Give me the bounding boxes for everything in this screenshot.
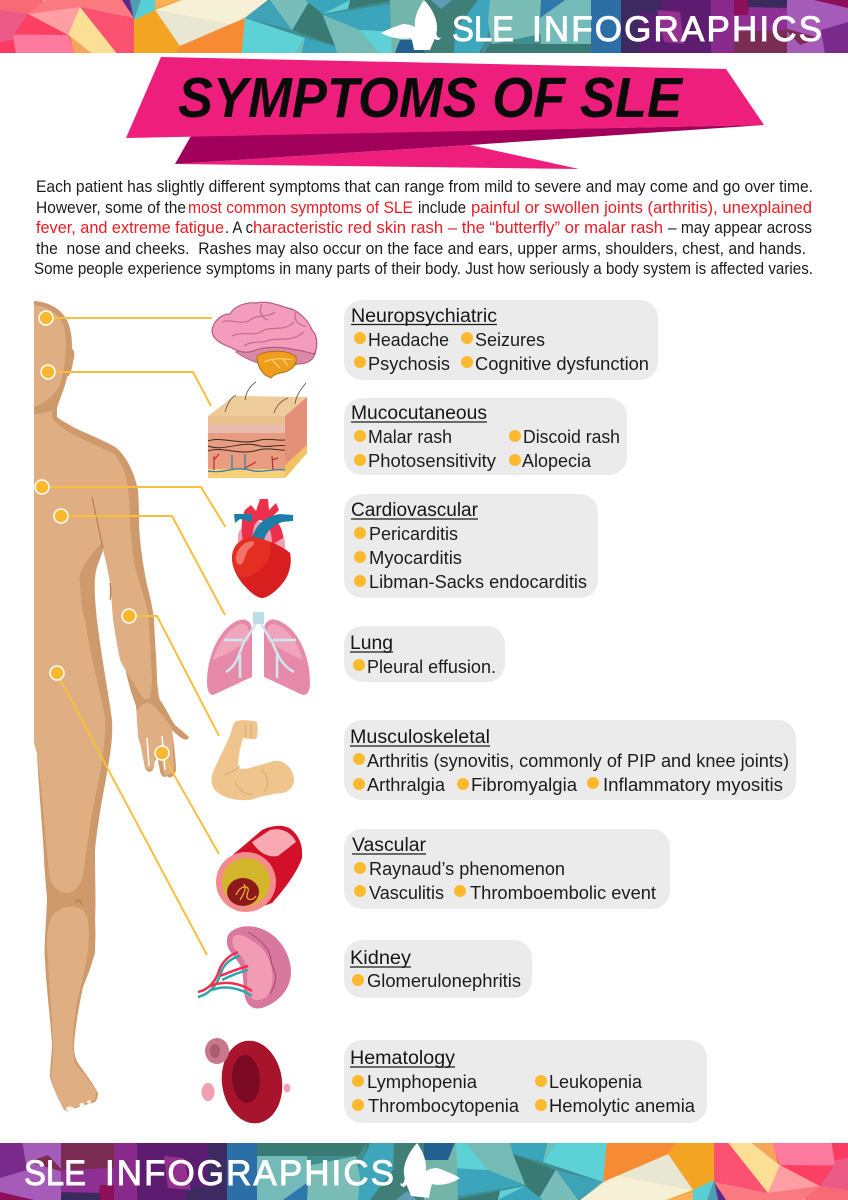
- panel: cardiovascular: Myocarditis: [369, 547, 462, 568]
- icon: butterfly bottom: [400, 1143, 460, 1198]
- panel: cardiovascular: Cardiovascular: [351, 500, 479, 521]
- panel: neuropsychiatric: [344, 300, 658, 380]
- panel: musculoskeletal: Inflammatory myositis: [603, 774, 783, 795]
- intro paragraph: most common symptoms of SLE: [188, 199, 413, 217]
- panel: hematology: [344, 1040, 707, 1123]
- panel: vascular: Vascular: [352, 835, 427, 856]
- banner text bottom: INFOGRAPHICS: [105, 1154, 394, 1193]
- panel: mucocutaneous: [344, 398, 627, 475]
- intro paragraph: haracteristic red skin rash – the “butterfly” or malar rash: [253, 219, 663, 237]
- panel: mucocutaneous: Malar rash: [368, 426, 452, 447]
- icon: butterfly top: [381, 0, 441, 50]
- panel: vascular: Vasculitis: [369, 882, 444, 903]
- icon: red blood cells: [202, 1037, 290, 1127]
- panel: lung: Pleural effusion.: [367, 656, 496, 677]
- panel: musculoskeletal: Arthralgia: [367, 774, 446, 795]
- title: SYMPTOMS OF SLE: [178, 66, 684, 130]
- panel: hematology: Thrombocytopenia: [368, 1095, 520, 1116]
- intro paragraph: the nose and cheeks. Rashes may also occur on the face and ears, upper arms, shoulders, chest, and hands.: [36, 240, 806, 258]
- icon: skin cross-section: [208, 382, 307, 478]
- banner text top: INFOGRAPHICS: [532, 10, 822, 49]
- panel: hematology: Lymphopenia: [367, 1071, 478, 1092]
- icon: brain: [212, 302, 317, 378]
- panel: cardiovascular: [344, 494, 598, 598]
- panel: hematology: Leukopenia: [549, 1071, 643, 1092]
- panel: musculoskeletal: [344, 720, 796, 800]
- panel: cardiovascular: Pericarditis: [369, 523, 458, 544]
- intro paragraph: [34, 178, 813, 278]
- panel: mucocutaneous: Alopecia: [522, 450, 592, 471]
- panel: mucocutaneous: Mucocutaneous: [351, 403, 487, 424]
- top banner: [0, 0, 848, 53]
- panel: musculoskeletal: Arthritis (synovitis, commonly of PIP and knee joints): [367, 750, 789, 771]
- panel: lung: [344, 626, 505, 682]
- panel: vascular: [344, 829, 670, 909]
- panel: mucocutaneous: Discoid rash: [523, 426, 620, 447]
- panel: lung: Lung: [350, 633, 393, 654]
- intro paragraph: However, some of the: [36, 199, 186, 217]
- icon: kidney: [198, 926, 291, 1009]
- intro paragraph: include: [418, 199, 466, 217]
- panel: kidney: Kidney: [350, 948, 412, 969]
- panel: kidney: Glomerulonephritis: [367, 970, 521, 991]
- title ribbon: [126, 57, 764, 169]
- human body figure: [34, 301, 189, 1112]
- panel: cardiovascular: Libman-Sacks endocarditis: [369, 571, 587, 592]
- icon: heart: [232, 499, 293, 598]
- panel: hematology: Hematology: [350, 1048, 456, 1069]
- bottom banner: [0, 1140, 848, 1200]
- intro paragraph: fever, and extreme fatigue: [36, 219, 224, 237]
- intro paragraph: Each patient has slightly different symptoms that can range from mild to severe and may come and go over time.: [36, 178, 813, 196]
- panel: neuropsychiatric: Psychosis: [368, 353, 450, 374]
- panel: hematology: Hemolytic anemia: [549, 1095, 696, 1116]
- intro paragraph: . A c: [225, 219, 253, 237]
- panel: mucocutaneous: Photosensitivity: [368, 450, 497, 471]
- panel: musculoskeletal: Musculoskeletal: [350, 727, 490, 748]
- intro paragraph: painful or swollen joints (arthritis), unexplained: [471, 199, 812, 217]
- panel: kidney: [344, 940, 532, 998]
- connector lines and markers: [35, 311, 226, 955]
- panel: musculoskeletal: Fibromyalgia: [471, 774, 578, 795]
- intro paragraph: – may appear across: [668, 219, 812, 237]
- panel: neuropsychiatric: Cognitive dysfunction: [475, 353, 649, 374]
- panel: vascular: Raynaud’s phenomenon: [369, 858, 565, 879]
- banner text top: SLE: [452, 10, 514, 49]
- panel: neuropsychiatric: Headache: [368, 329, 449, 350]
- icon: flexed arm muscle: [212, 720, 294, 800]
- panel: neuropsychiatric: Neuropsychiatric: [351, 306, 497, 327]
- panel: vascular: Thromboembolic event: [470, 882, 656, 903]
- banner text bottom: SLE: [24, 1154, 86, 1193]
- icon: blood vessel with clot: [216, 826, 302, 912]
- panel: neuropsychiatric: Seizures: [475, 329, 545, 350]
- icon: lungs: [207, 612, 310, 695]
